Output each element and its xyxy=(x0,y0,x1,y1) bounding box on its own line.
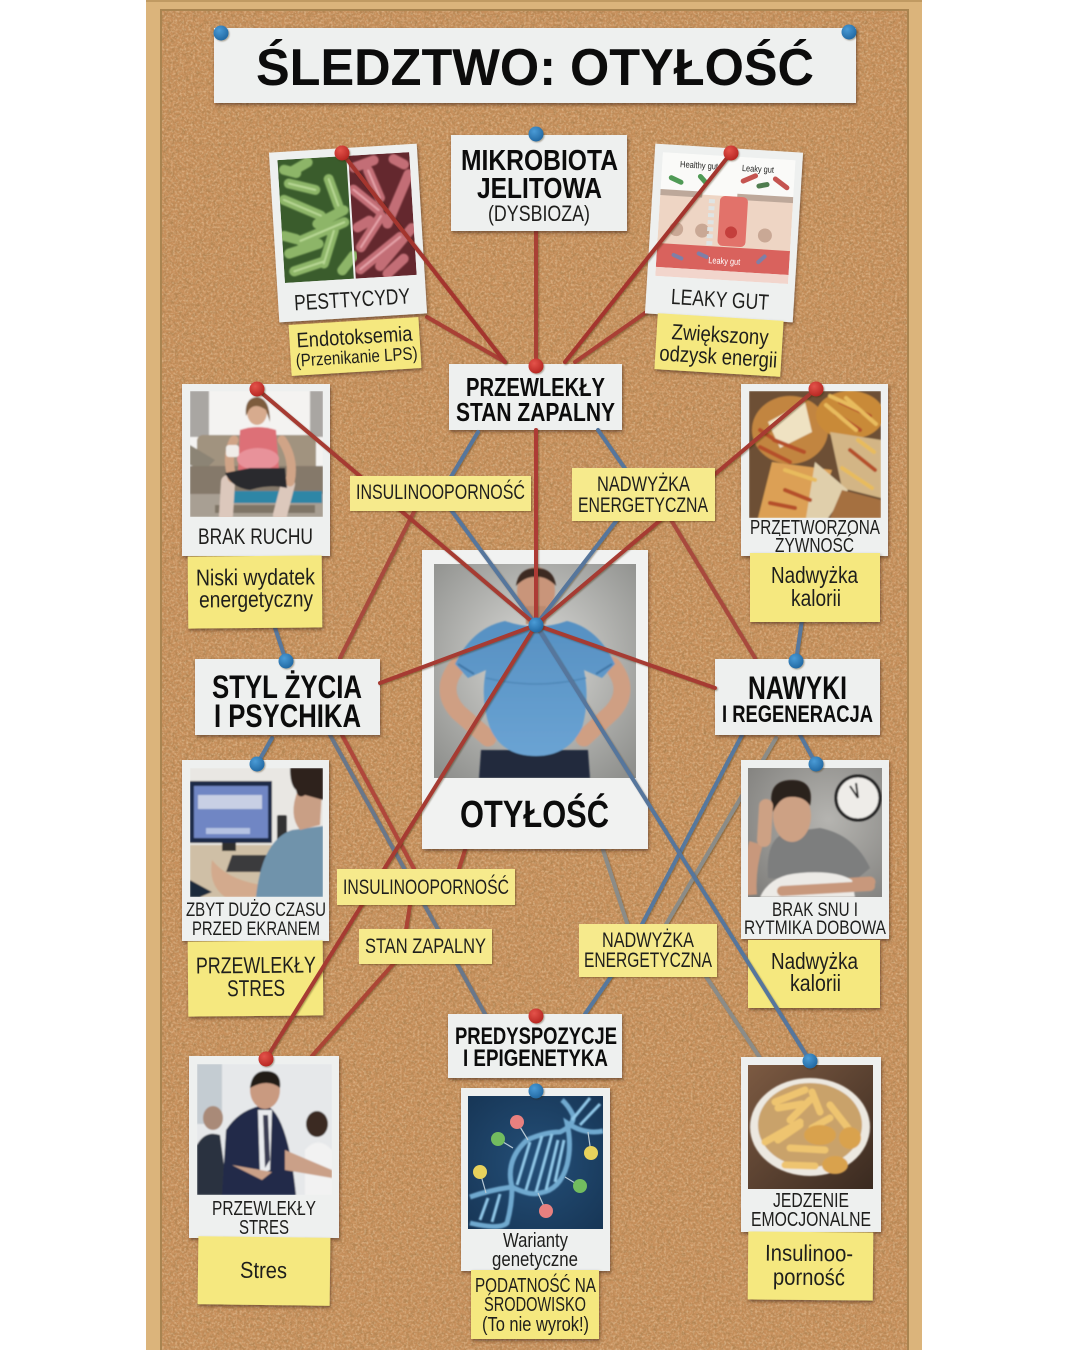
tag: Stan zapalny: STAN ZAPALNY xyxy=(365,935,486,958)
photo: woman sitting on sofa xyxy=(190,391,323,517)
polaroid: Pesttycydy xyxy=(269,144,427,322)
push pins xyxy=(214,24,856,1098)
photo: green and red bacteria xyxy=(277,152,417,283)
card: Styl życia i psychika: STYL ŻYCIA xyxy=(212,669,362,705)
card: Styl życia i psychika xyxy=(195,659,380,735)
tag: Stan zapalny xyxy=(359,929,492,964)
sticky note: Endotoksemia xyxy=(289,317,421,376)
sticky note: Przewlekły stres: PRZEWLEKŁY xyxy=(196,951,316,979)
sticky note: Endotoksemia: Endotoksemia xyxy=(296,322,413,353)
photo: pizza and fries xyxy=(749,391,884,518)
card: Mikrobiota jelitowa: (DYSBIOZA) xyxy=(488,201,590,226)
photo: businessman in meeting xyxy=(197,1064,332,1195)
label: PESTTYCYDY xyxy=(293,283,411,315)
photo: tired man with clock xyxy=(748,768,882,897)
sticky note: Niski wydatek energetyczny xyxy=(188,555,322,629)
polaroid: Zbyt dużo czasu przed ekranem xyxy=(182,760,329,941)
card: Nawyki i regeneracja: I REGENERACJA xyxy=(722,701,873,728)
label: LEAKY GUT xyxy=(670,284,770,315)
card: Nawyki i regeneracja: NAWYKI xyxy=(748,670,847,706)
label: PRZETWORZONA xyxy=(750,517,880,539)
sticky note: Niski wydatek energetyczny: Niski wydatek xyxy=(196,563,315,591)
photo: man at computer xyxy=(190,768,323,897)
photo: DNA helix xyxy=(468,1096,603,1229)
photo: obese man in blue t-shirt xyxy=(434,564,636,778)
card: Przewlekły stan zapalny xyxy=(449,364,622,430)
title banner: ŚLEDZTWO: OTYŁOŚĆ xyxy=(256,39,814,97)
polaroid: Przewlekły stres: STRES xyxy=(239,1217,289,1239)
sticky note: Endotoksemia: (Przenikanie LPS) xyxy=(295,343,418,371)
photo: gut barrier diagram: Healthy gut xyxy=(680,159,719,172)
card: Mikrobiota jelitowa: JELITOWA xyxy=(477,173,602,205)
label: Warianty xyxy=(503,1230,568,1252)
tag: Nadwyżka energetyczna upper xyxy=(572,468,715,521)
label: BRAK SNU I xyxy=(772,900,858,921)
tag: Insulinooporność lower: INSULINOOPORNOŚĆ xyxy=(343,875,509,899)
sticky note: Podatność na środowisko: PODATNOŚĆ NA xyxy=(475,1273,596,1297)
sticky note: Nadwyżka kalorii xyxy=(750,553,880,622)
sticky note: Nadwyżka kalorii 2 xyxy=(748,940,880,1008)
card: Predyspozycje i epigenetyka: PREDYSPOZYCJE xyxy=(455,1023,617,1050)
label: ZBYT DUŻO CZASU xyxy=(186,900,326,921)
sticky note: Podatność na środowisko: (To nie wyrok!) xyxy=(482,1314,589,1336)
sticky note: Insulinooporność: Insulinoo- xyxy=(765,1240,853,1266)
sticky note: Insulinooporność: porność xyxy=(773,1264,845,1290)
sticky note: Niski wydatek energetyczny: energetyczny xyxy=(199,585,314,612)
strings over cards xyxy=(257,153,816,1061)
polaroid: Warianty genetyczne xyxy=(461,1088,610,1271)
label: PRZEWLEKŁY xyxy=(212,1198,316,1220)
polaroid: Brak ruchu xyxy=(182,384,330,556)
tag: Nadwyżka energetyczna lower: ENERGETYCZNA xyxy=(584,949,712,972)
photo: gut barrier diagram: Leaky gut xyxy=(708,255,741,267)
tag: Nadwyżka energetyczna lower xyxy=(579,924,717,977)
sticky note: Stres xyxy=(198,1236,330,1306)
label: BRAK RUCHU xyxy=(198,524,313,549)
gene markers xyxy=(473,1115,598,1218)
tag: Insulinooporność upper xyxy=(350,476,531,511)
sticky note: Stres: Stres xyxy=(240,1257,287,1283)
polaroid: Przewlekły stres xyxy=(189,1056,339,1239)
card: Przewlekły stan zapalny: PRZEWLEKŁY xyxy=(466,372,605,402)
sticky note: Nadwyżka kalorii 2: kalorii xyxy=(790,970,841,996)
sticky note: Zwiększony odzysk energii: odzysk energii xyxy=(659,340,778,373)
sticky note: Nadwyżka kalorii 2: Nadwyżka xyxy=(771,948,858,974)
sticky note: Insulinooporność xyxy=(748,1231,873,1301)
label: OTYŁOŚĆ xyxy=(460,792,609,836)
strings behind cards xyxy=(257,231,816,1058)
sticky note: Nadwyżka kalorii: kalorii xyxy=(791,585,841,611)
sticky note: Przewlekły stres: STRES xyxy=(227,975,285,1001)
sticky note: Zwiększony odzysk energii xyxy=(654,313,784,377)
photo: bowl of fries xyxy=(748,1065,873,1189)
sticky note: Przewlekły stres xyxy=(188,940,323,1017)
card: Nawyki i regeneracja xyxy=(715,659,880,735)
sticky note: Podatność na środowisko: ŚRODOWISKO xyxy=(484,1292,586,1316)
tag: Insulinooporność lower xyxy=(337,869,515,905)
polaroid: Zbyt dużo czasu przed ekranem: PRZED EKRANEM xyxy=(192,919,320,940)
label: JEDZENIE xyxy=(773,1190,849,1212)
photo: gut barrier diagram xyxy=(655,152,796,284)
card: Przewlekły stan zapalny: STAN ZAPALNY xyxy=(456,397,615,427)
polaroid: Przetworzona żywność: ŻYWNOŚĆ xyxy=(775,533,854,557)
title banner xyxy=(214,28,856,103)
polaroid: Brak snu i rytmika dobowa xyxy=(741,760,889,939)
polaroid: central photo Otyłość xyxy=(422,550,648,849)
tag: Insulinooporność upper: INSULINOOPORNOŚĆ xyxy=(356,480,525,504)
sticky note: Podatność na środowisko xyxy=(471,1270,599,1339)
card: Predyspozycje i epigenetyka xyxy=(448,1014,622,1078)
polaroid: Przetworzona żywność xyxy=(741,384,888,557)
photo: gut barrier diagram: Leaky gut xyxy=(742,163,775,175)
polaroid: Brak snu i rytmika dobowa: RYTMIKA DOBOWA xyxy=(744,918,886,939)
card: Mikrobiota jelitowa xyxy=(451,135,627,231)
cork board with wooden frame xyxy=(146,0,922,1350)
sticky note: Zwiększony odzysk energii: Zwiększony xyxy=(671,319,769,350)
sticky note: Nadwyżka kalorii: Nadwyżka xyxy=(771,562,858,588)
polaroid: Jedzenie emocjonalne: EMOCJONALNE xyxy=(751,1209,871,1231)
polaroid: Warianty genetyczne: genetyczne xyxy=(492,1249,578,1271)
polaroid: Leaky gut xyxy=(645,144,803,322)
card: Predyspozycje i epigenetyka: I EPIGENETYKA xyxy=(463,1045,608,1072)
card: Styl życia i psychika: I PSYCHIKA xyxy=(214,698,361,734)
polaroid: Jedzenie emocjonalne xyxy=(741,1057,881,1232)
card: Mikrobiota jelitowa: MIKROBIOTA xyxy=(461,145,618,177)
tag: Nadwyżka energetyczna upper: ENERGETYCZNA xyxy=(578,494,708,517)
tag: Nadwyżka energetyczna upper: NADWYŻKA xyxy=(597,473,690,496)
tag: Nadwyżka energetyczna lower: NADWYŻKA xyxy=(602,929,694,952)
